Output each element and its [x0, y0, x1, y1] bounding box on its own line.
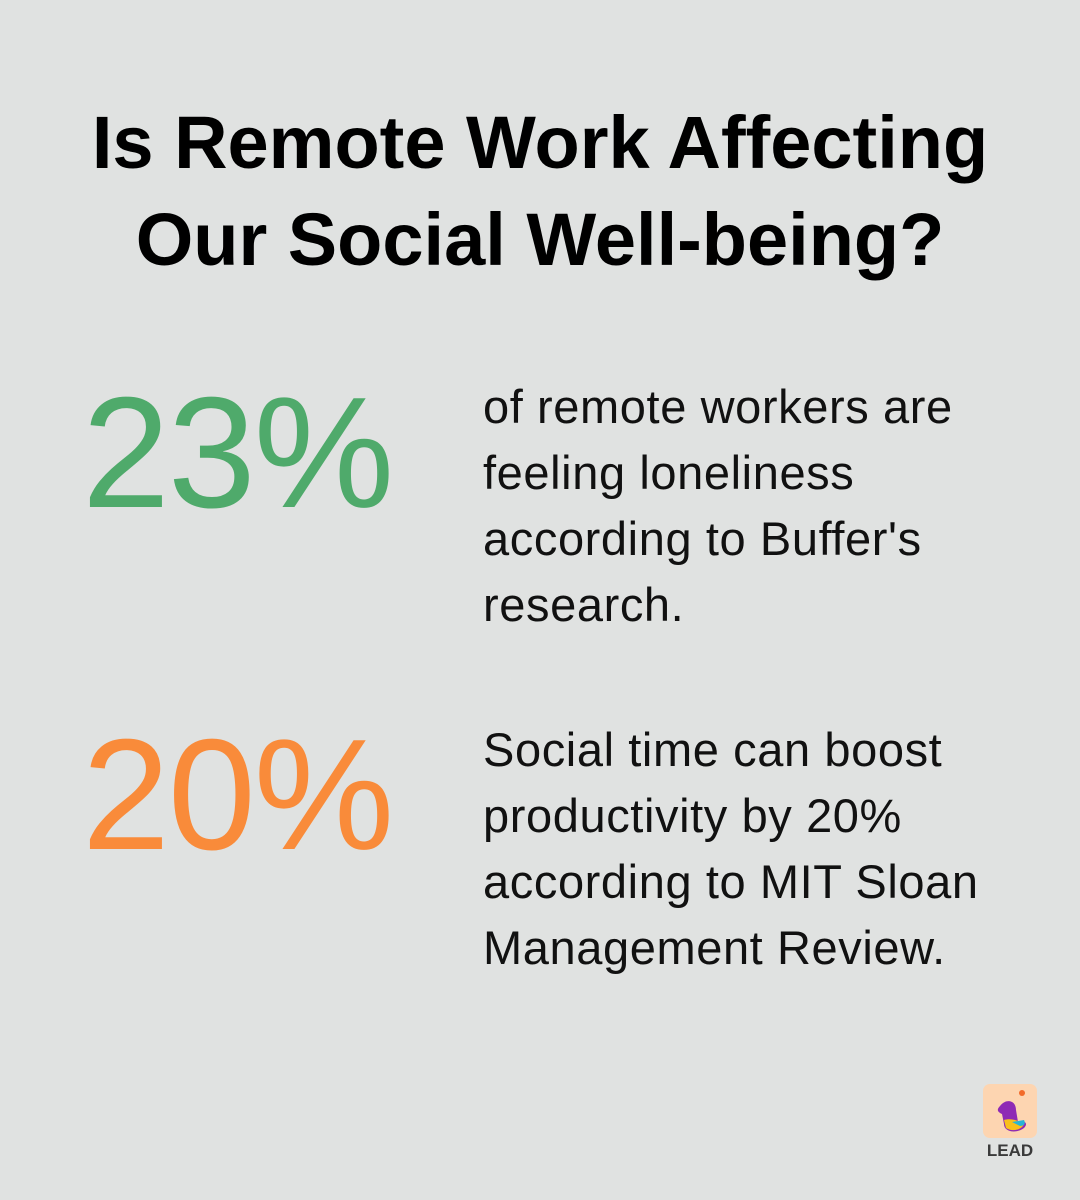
title: Our Social Well-being?	[136, 198, 944, 281]
text: loneliness: research.	[483, 578, 684, 631]
title	[92, 101, 988, 281]
stat: 20%: 20%	[82, 707, 392, 883]
text: loneliness	[483, 380, 953, 631]
text: productivity: Management Review.	[483, 921, 946, 974]
text: productivity: Social time can boost	[483, 723, 942, 776]
text: productivity: according to MIT Sloan	[483, 855, 979, 908]
text: loneliness: of remote workers are	[483, 380, 953, 433]
text: productivity: productivity by 20%	[483, 789, 902, 842]
logo: LEAD	[983, 1084, 1037, 1160]
title: Is Remote Work Affecting	[92, 101, 988, 184]
text: loneliness: according to Buffer's	[483, 512, 922, 565]
stat: 23%: 23%	[82, 365, 392, 541]
text: loneliness: feeling loneliness	[483, 446, 854, 499]
logo: LEAD: LEAD	[987, 1141, 1033, 1160]
text: productivity	[483, 723, 979, 974]
